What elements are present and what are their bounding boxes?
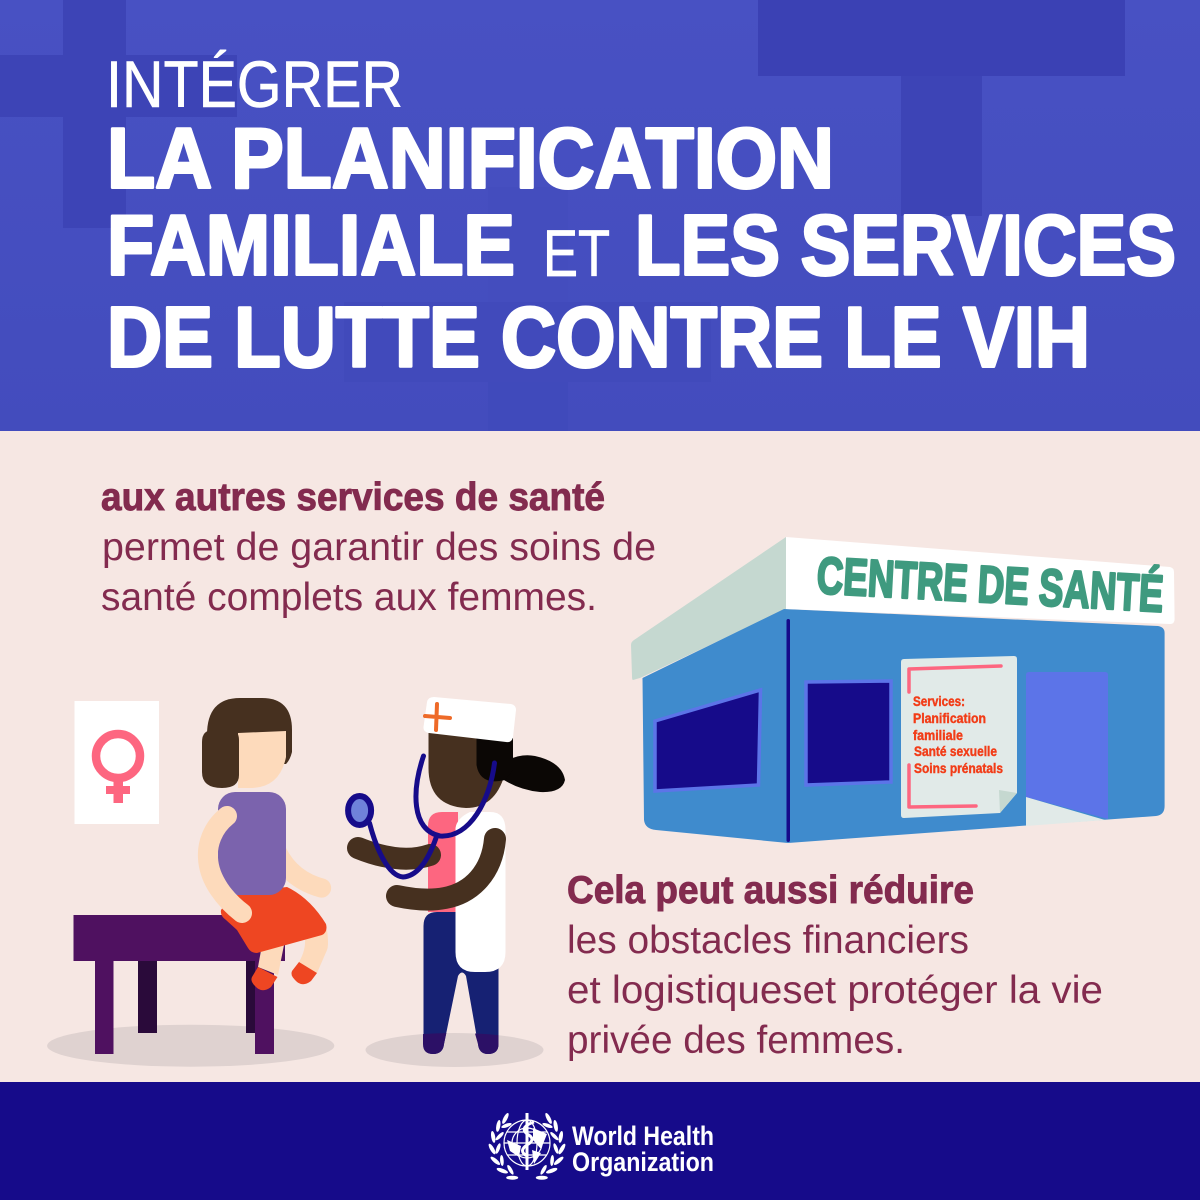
poster [901, 656, 1017, 818]
sign board [786, 537, 1175, 624]
illustration: health centre [631, 537, 1175, 843]
poster: Planification [913, 711, 986, 726]
title: LA PLANIFICATION [107, 112, 834, 206]
text block: autres services [101, 476, 656, 619]
text block: réduire les obstacles [567, 869, 1103, 1062]
stethoscope [348, 756, 494, 877]
legs [258, 930, 328, 975]
far arm [358, 848, 430, 859]
far arm [286, 848, 331, 898]
wordmark: World Health [572, 1121, 714, 1151]
hair [476, 738, 513, 781]
roof side [631, 537, 786, 680]
patient [202, 698, 331, 990]
wordmark [572, 1121, 714, 1177]
text block: réduire les obstacles: privée des femmes. [567, 1019, 905, 1062]
wall poster: female symbol [74, 701, 159, 824]
text block: autres services: permet de garantir des soins de [102, 526, 656, 569]
emblem [487, 1112, 567, 1180]
face [428, 733, 504, 808]
trousers in shadow [423, 1033, 498, 1054]
header panel [0, 0, 1200, 431]
door [1026, 672, 1108, 819]
poster: Santé sexuelle [914, 744, 997, 759]
left window [655, 690, 760, 791]
WHO logo [487, 1112, 714, 1180]
title [106, 47, 1176, 386]
hat [423, 697, 516, 742]
shirt [428, 812, 458, 912]
title: DE LUTTE CONTRE LE VIH [107, 290, 1090, 386]
text block: autres services: santé complets aux femmes. [101, 576, 597, 619]
near arm [397, 839, 495, 900]
poster: Soins prénatals [914, 761, 1003, 776]
text block: réduire les obstacles: et logistiqueset protéger la vie [567, 969, 1103, 1012]
poster: familiale [913, 728, 963, 743]
title: FAMILIALE [107, 198, 515, 294]
white coat [456, 812, 506, 972]
doctor [348, 697, 565, 1054]
wordmark: Organization [572, 1147, 714, 1177]
building body [642, 609, 1165, 843]
text block: réduire les obstacles: les obstacles financiers [567, 919, 969, 962]
door floor [1026, 797, 1105, 826]
floor shadow: table [47, 1025, 334, 1067]
footer band [0, 1082, 1200, 1200]
title: INTÉGRER [106, 47, 403, 121]
near arm [208, 816, 242, 913]
text block: autres services: aux autres services de santé [101, 476, 605, 519]
shoes [251, 962, 317, 990]
title: ET [543, 216, 610, 290]
torso [218, 792, 286, 895]
trousers [423, 912, 498, 1054]
poster: Services: [913, 694, 965, 709]
floor shadow: doctor [366, 1033, 544, 1067]
skirt [221, 887, 326, 953]
text block: réduire les obstacles: Cela peut aussi réduire [567, 869, 974, 912]
ponytail [504, 755, 565, 792]
middle window [806, 681, 891, 785]
examination table [74, 915, 285, 1054]
head [202, 698, 292, 788]
corner divider [786, 619, 790, 842]
